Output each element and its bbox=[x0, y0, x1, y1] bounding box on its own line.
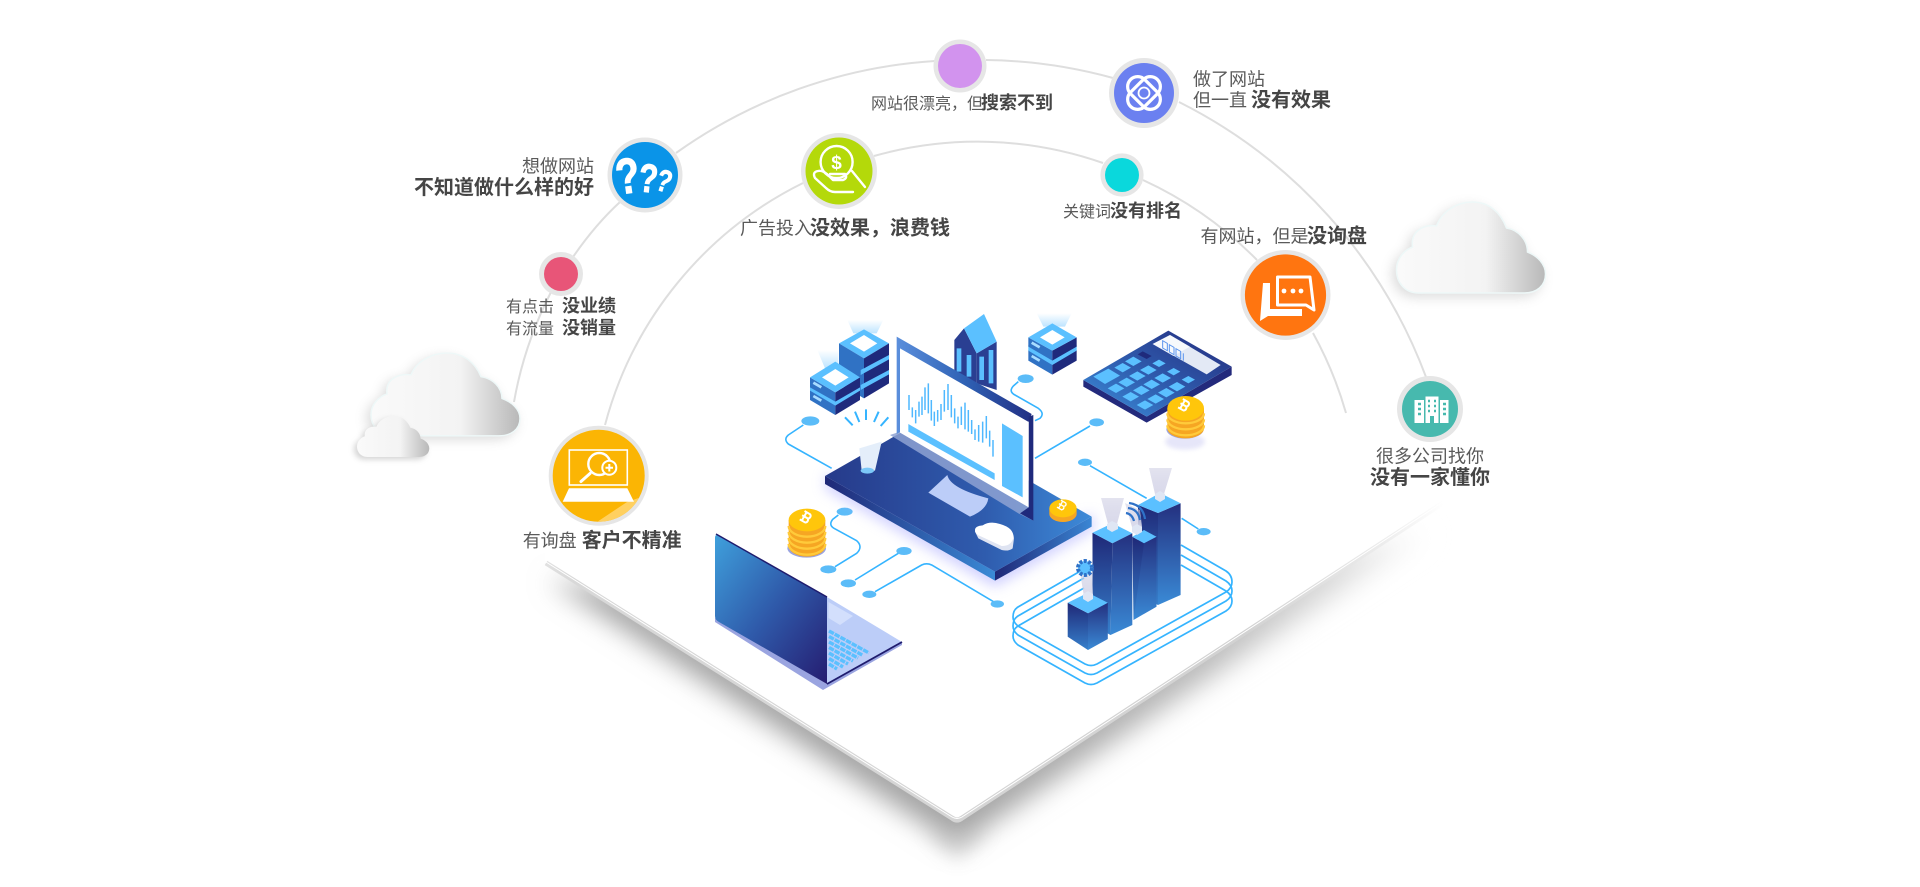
cloud: left small bbox=[354, 416, 429, 460]
icon: coin in hand: $ bbox=[831, 153, 842, 174]
icon: purple dot bbox=[934, 40, 986, 92]
wifi bbox=[1126, 503, 1145, 521]
label: 做了网站: 但一直 bbox=[1193, 90, 1247, 110]
icon: office building bbox=[1397, 376, 1463, 442]
spot beams bbox=[1080, 468, 1172, 597]
building behind monitor bbox=[954, 314, 997, 390]
icon: question marks: ? bbox=[652, 162, 677, 200]
inner arc connector bbox=[605, 142, 1346, 425]
tower D bbox=[1138, 493, 1181, 605]
coin stack: left bbox=[787, 509, 826, 558]
label: 有点击 有流量: 没销量 bbox=[562, 318, 616, 338]
isometric illustration bbox=[715, 313, 1232, 690]
outer arc connector bbox=[514, 60, 1426, 402]
icon: question marks bbox=[608, 138, 682, 212]
label: 很多公司找你: 没有一家懂你 bbox=[1370, 465, 1490, 489]
isometric white floor with shadow bbox=[545, 250, 1446, 862]
tower B bbox=[1092, 523, 1132, 635]
label: 网站很漂亮 bbox=[871, 93, 1053, 113]
upper illustration in traced coordinates bbox=[786, 313, 1232, 608]
coin stack: calculator bbox=[1165, 396, 1205, 450]
label: 有网站 bbox=[1200, 224, 1367, 248]
label: 做了网站: 没有效果 bbox=[1251, 88, 1331, 112]
server stack: back left bbox=[839, 320, 889, 398]
tower C bbox=[1132, 530, 1156, 620]
towers bbox=[1068, 468, 1181, 650]
cloud: right bbox=[1392, 202, 1546, 297]
glass beaker with rays bbox=[845, 409, 888, 474]
label: 有网站: 有网站，但是 bbox=[1200, 226, 1308, 246]
icon: atom bbox=[1109, 58, 1179, 128]
label: 广告投入: 没效果，浪费钱 bbox=[810, 216, 950, 240]
server stack: right bbox=[1028, 313, 1077, 375]
gear bbox=[1078, 561, 1092, 575]
calculator bbox=[1083, 331, 1232, 423]
icon: pink dot bbox=[539, 252, 583, 296]
tower A bbox=[1068, 593, 1108, 650]
label: 想做网站 bbox=[414, 156, 594, 199]
label: 有点击 有流量: 没业绩 bbox=[562, 295, 616, 316]
stock chart bbox=[909, 383, 993, 457]
label: 有网站: 没询盘 bbox=[1307, 224, 1367, 248]
label: 很多公司找你 bbox=[1370, 446, 1490, 489]
label: 网站很漂亮: 搜索不到 bbox=[981, 93, 1053, 113]
cloud on desk bbox=[975, 523, 1014, 551]
label: 有点击 有流量 bbox=[506, 295, 616, 338]
circuit lines with nodes bbox=[786, 382, 1198, 604]
label: 有询盘 bbox=[523, 528, 682, 552]
label: 关键词 bbox=[1063, 201, 1182, 221]
cloud: left large bbox=[367, 353, 520, 439]
icon: question marks: ? bbox=[612, 146, 643, 206]
label: 很多公司找你: 很多公司找你 bbox=[1376, 446, 1484, 466]
label: 想做网站: 不知道做什么样的好 bbox=[414, 176, 594, 199]
label: 广告投入: 广告投入 bbox=[740, 218, 812, 238]
server stack: front left bbox=[810, 350, 860, 415]
label: 有询盘: 有询盘 bbox=[523, 531, 577, 551]
label: 广告投入 bbox=[740, 216, 950, 240]
label: 关键词: 没有排名 bbox=[1110, 201, 1182, 221]
monitor stand bbox=[928, 475, 988, 517]
icon: laptop search bbox=[549, 426, 650, 530]
label: 做了网站 bbox=[1193, 70, 1331, 112]
monitor bbox=[890, 337, 1033, 521]
label: 有询盘: 客户不精准 bbox=[582, 528, 682, 552]
circuit loops under towers bbox=[1013, 545, 1232, 684]
label: 关键词: 关键词 bbox=[1063, 204, 1111, 221]
icon: chat bubbles bbox=[1240, 250, 1330, 340]
label: 网站很漂亮: 网站很漂亮，但 bbox=[871, 96, 983, 113]
label: 有点击 有流量: 有流量 bbox=[506, 321, 554, 338]
label: 有点击 有流量: 有点击 bbox=[506, 299, 554, 316]
icon: coin in hand bbox=[801, 133, 877, 209]
icon: cyan dot bbox=[1100, 153, 1144, 197]
label: 做了网站: 做了网站 bbox=[1193, 70, 1265, 90]
icon: question marks: ? bbox=[637, 156, 660, 202]
small coin stack on desk bbox=[1049, 499, 1077, 522]
laptop bbox=[715, 534, 902, 690]
desk bbox=[825, 420, 1092, 581]
label: 想做网站: 想做网站 bbox=[522, 156, 594, 176]
beam landing glows bbox=[1083, 491, 1165, 602]
desk glow bbox=[825, 473, 1093, 587]
